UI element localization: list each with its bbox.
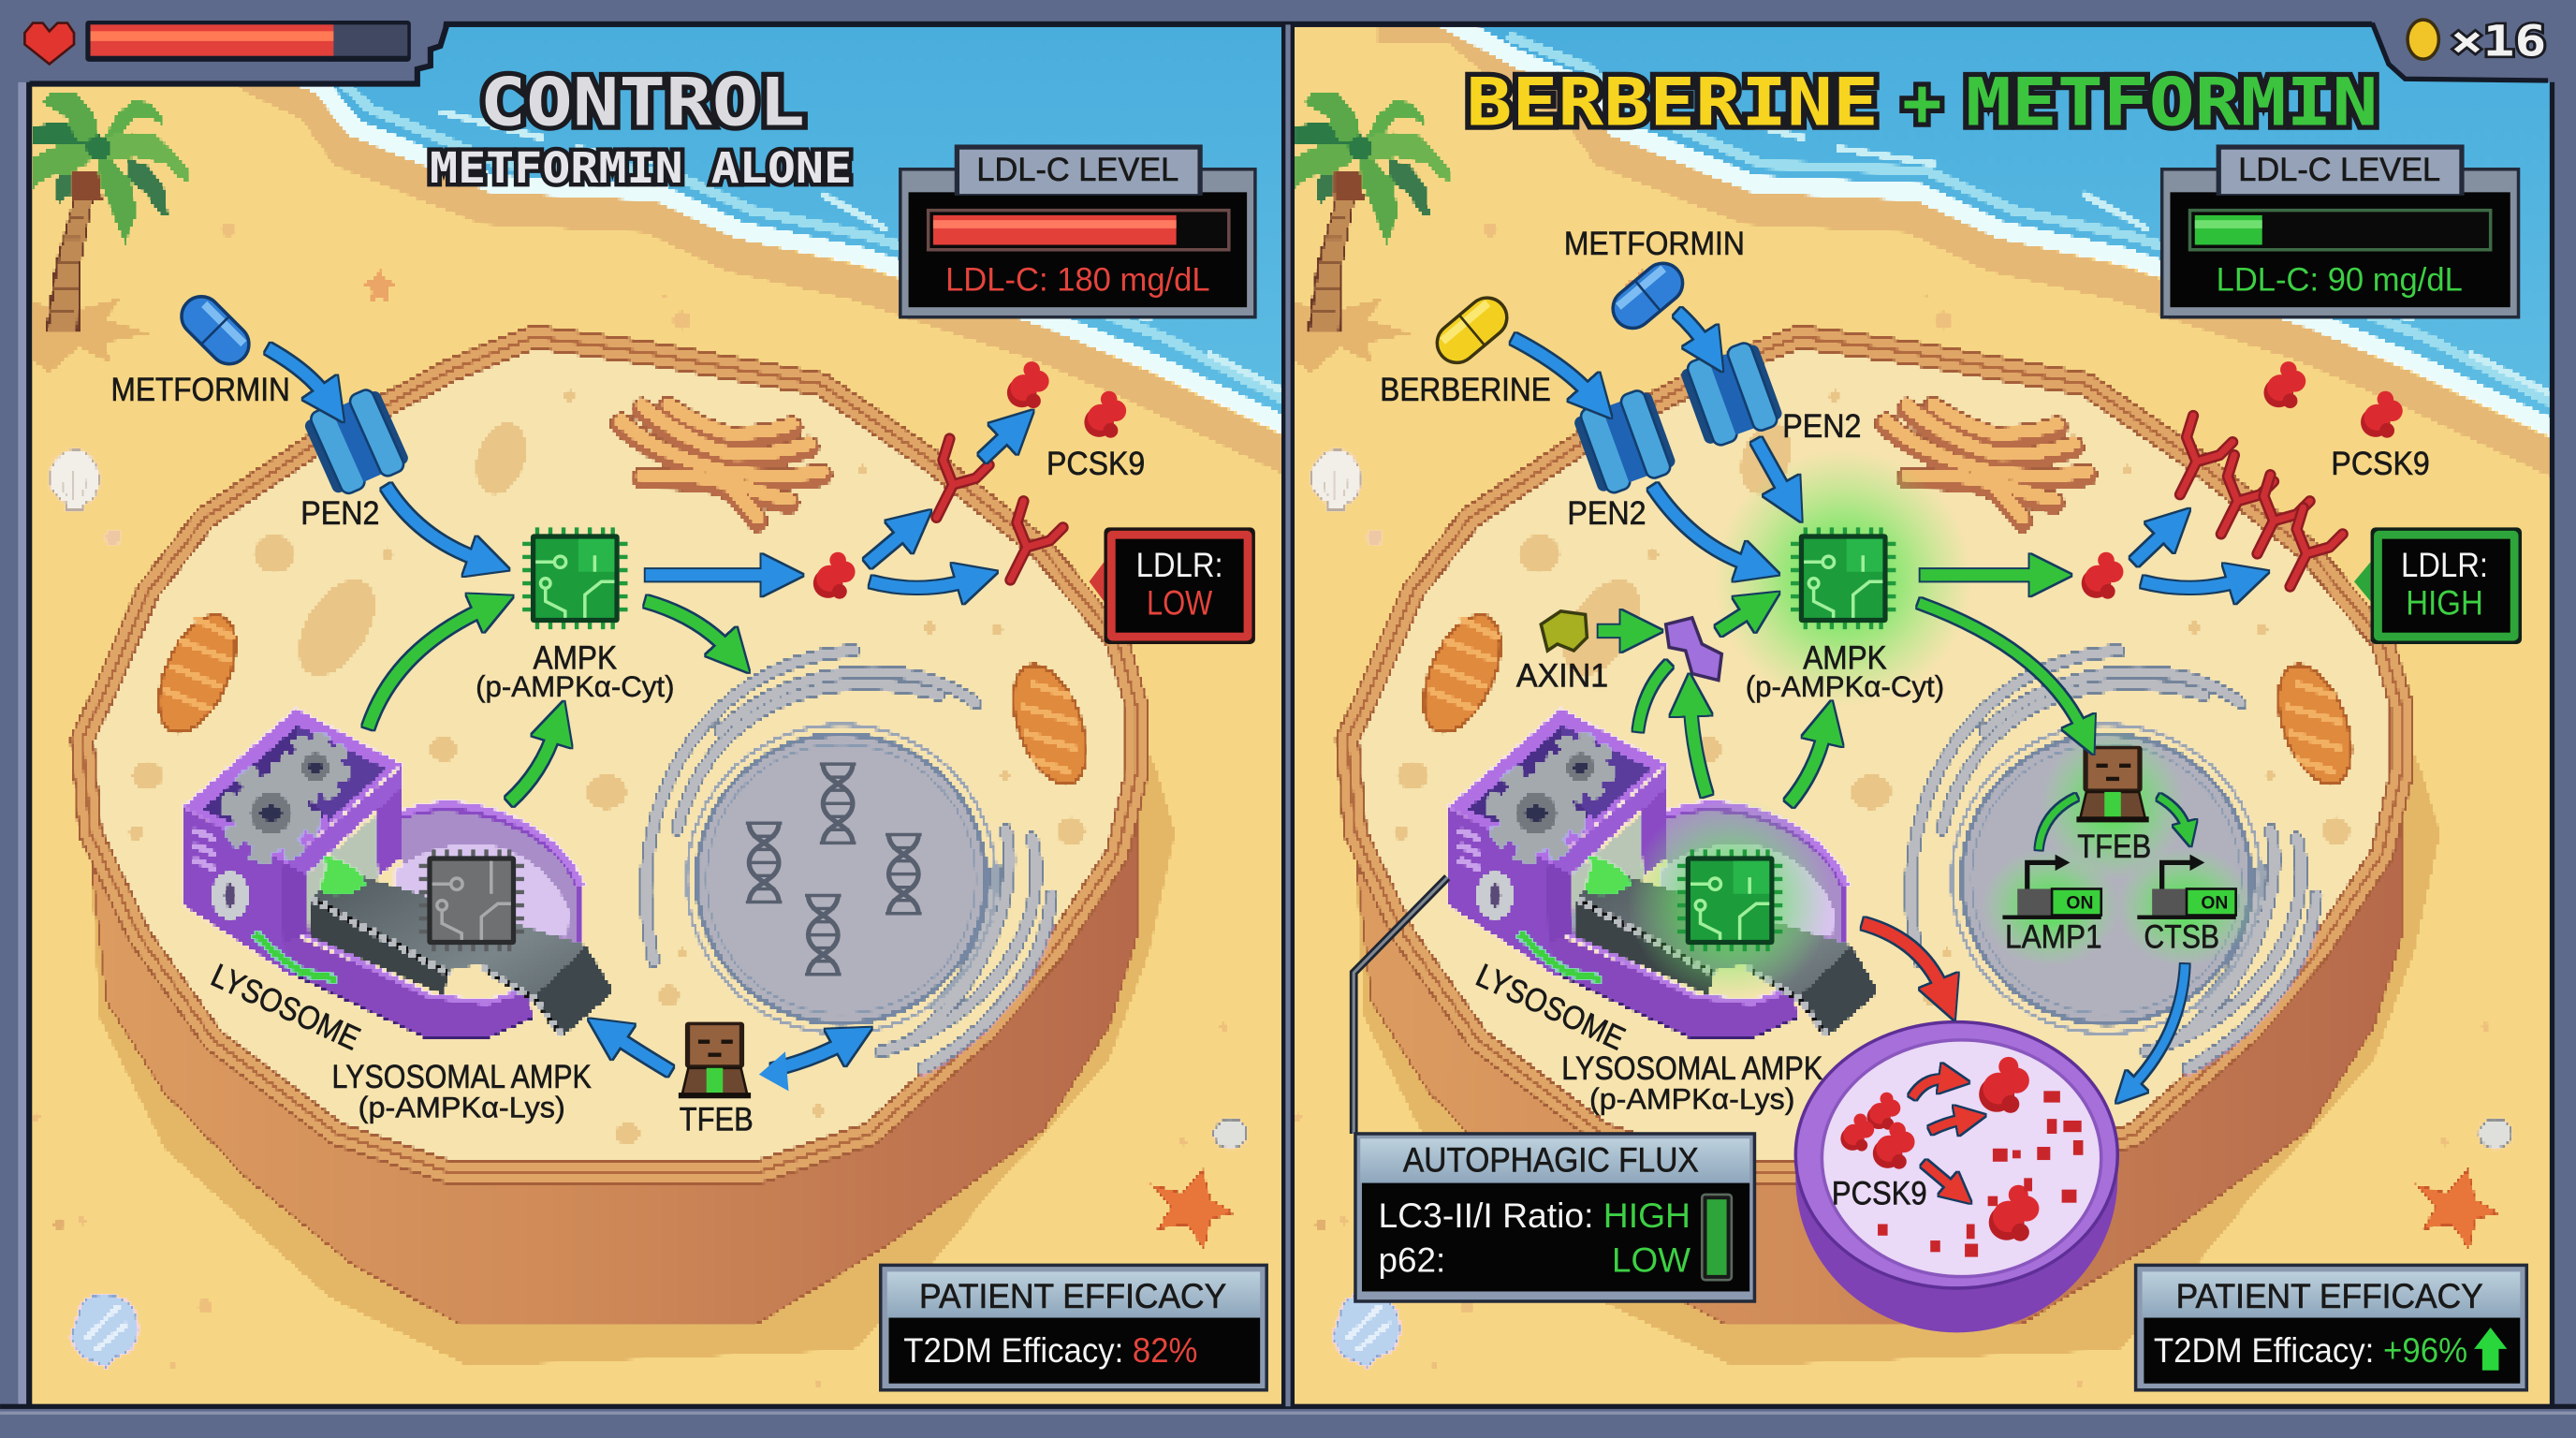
arrow: TFEB to lysosome (613, 1035, 670, 1071)
icon: blue shell (71, 1295, 138, 1367)
arrow: CTSB to lysosome (2130, 964, 2185, 1088)
connector line to autophagic flux panel (1354, 877, 1447, 1134)
health bar (85, 21, 411, 62)
gene switch CTSB (2137, 855, 2236, 919)
pixelated background scene (32, 27, 1281, 1404)
callout: LDLR high (2354, 527, 2522, 644)
title: berberine + metformin: BERBERINE (1466, 64, 1879, 140)
label berberine: BERBERINE (1380, 372, 1551, 408)
icon: up arrow (2474, 1328, 2507, 1371)
arrows (268, 348, 1012, 1071)
p62 value: LOW (1612, 1240, 1690, 1279)
icon: berberine pill (1429, 290, 1515, 371)
title: control: CONTROL (480, 64, 805, 140)
golgi apparatus (621, 404, 822, 522)
panel: patient efficacy control (879, 1264, 1268, 1392)
PCSK9 free (1007, 361, 1126, 438)
gene switch CTSB: ON (2201, 894, 2228, 914)
icon: starfish (2415, 1170, 2498, 1249)
icon: metformin pill (173, 288, 257, 372)
arrow: PEN2 to AMPK lower (1653, 486, 1751, 565)
arrow: lysosome to complex left (1638, 664, 1669, 731)
background: sea and sand (1262, 0, 2576, 1438)
HUD: coin counter (2371, 0, 2576, 82)
panel: berberine + metformin scene (right) (1262, 0, 2576, 1438)
background: sea and sand (32, 27, 1281, 1404)
label AMPK: AMPK (1803, 639, 1887, 676)
arrow: AMPK to nucleus (646, 601, 729, 651)
title: berberine + metformin: METFORMIN (1966, 64, 2378, 140)
arrow: PCSK9 to LDLR (871, 580, 970, 588)
HUD: health bar (0, 0, 446, 84)
label lysosome: LYSOSOME (1471, 957, 1631, 1058)
arrow: AMPK to PCSK9 (1921, 572, 2042, 579)
arrow: AMPK to PCSK9 (646, 572, 774, 579)
beach decorations (1293, 222, 2491, 1388)
label metformin: METFORMIN (1564, 226, 1745, 262)
gene switch LAMP1 (2002, 855, 2101, 919)
panel: LDL-C level combo (2160, 144, 2520, 318)
label CTSB: CTSB (2144, 919, 2219, 956)
value: LDL-C: 180 mg/dL (945, 262, 1210, 299)
mitochondrion right (999, 655, 1101, 794)
arrow: PEN2 to AMPK (386, 486, 481, 560)
label PCSK9: PCSK9 (1046, 446, 1145, 482)
label p-AMPK lys: (p-AMPKα-Lys) (1589, 1082, 1794, 1116)
panel: control scene (left) (32, 27, 1281, 1404)
panel: patient efficacy combo (2134, 1264, 2528, 1392)
panel: LDL-C level control (899, 144, 1257, 318)
arrow: fragment flow 1 (1912, 1079, 1949, 1097)
lysosome machine (1447, 708, 1876, 1038)
label PEN2 upper: PEN2 (1782, 408, 1862, 445)
arrowhead: TFEB exchange back end (759, 1051, 788, 1091)
label AXIN1: AXIN1 (1516, 658, 1608, 695)
callout: LDLR low (1090, 527, 1255, 644)
panel: autophagic flux (1354, 1132, 1756, 1303)
label PCSK9 in lysosome: PCSK9 (1832, 1175, 1927, 1211)
label metformin: METFORMIN (111, 372, 290, 408)
lysosome machine (183, 708, 611, 1038)
arrow: lysosome to AMPK (1789, 729, 1825, 803)
nucleus (1952, 725, 2261, 1034)
nucleus (687, 725, 996, 1034)
PEN2 channel (301, 385, 412, 499)
AMPK chip (522, 527, 627, 629)
golgi apparatus (1886, 404, 2086, 522)
arrow: TFEB to LAMP1 (2039, 797, 2076, 849)
arrow: receptor to free PCSK9 (983, 431, 1012, 459)
icon: palm tree (1295, 94, 1453, 374)
coin count: ×16 (2452, 17, 2546, 66)
label PEN2: PEN2 (300, 495, 379, 532)
icon: AXIN1 (1541, 611, 1587, 651)
arrow: TFEB nucleus exchange (772, 1042, 846, 1070)
AMPK chip (1791, 527, 1895, 629)
icon: pebble (1214, 1119, 1247, 1149)
label p-AMPK cyt: (p-AMPKα-Cyt) (1746, 669, 1944, 703)
glow: lysosomal AMPK (1628, 799, 1832, 1003)
label p-AMPK cyt: (p-AMPKα-Cyt) (476, 669, 674, 703)
heading: LDL-C LEVEL (2238, 152, 2440, 188)
icon: pebble (2479, 1119, 2511, 1149)
PCSK9 free (2263, 361, 2403, 438)
labels: combo scene (1380, 226, 2430, 1211)
TFEB character (2076, 746, 2149, 822)
value: T2DM Efficacy: +96% (2154, 1331, 2467, 1370)
PCSK9 fragments (1840, 1057, 2083, 1257)
icon: purple complex (1666, 618, 1721, 681)
inactive lysosomal AMPK chip (419, 849, 524, 951)
row: p62: p62: (1379, 1240, 1445, 1279)
arrow: AMPK to TFEB (1919, 603, 2083, 731)
pixelated background scene (1262, 0, 2576, 1438)
PEN2 channel upper (1677, 339, 1785, 450)
endoplasmic reticulum (646, 651, 1051, 1068)
arrow: complex to AMPK (1719, 608, 1754, 631)
heading: AUTOPHAGIC FLUX (1403, 1140, 1699, 1179)
callout: LDLR high: LDLR: (2401, 546, 2488, 584)
arrow: PEN2 to AMPK upper (1756, 440, 1788, 496)
cell body and membrane (1347, 337, 2441, 1367)
DNA helices (746, 764, 922, 975)
arrow: metformin to PEN2 (268, 348, 327, 398)
row: LC3 ratio: LC3-II/I Ratio: HIGH (1379, 1196, 1690, 1235)
level bar (2190, 211, 2491, 250)
callout: LDLR low: LOW (1147, 583, 1212, 622)
label AMPK: AMPK (534, 639, 618, 676)
gene switch LAMP1: ON (2066, 894, 2093, 914)
LDL receptors (936, 439, 1063, 580)
label lysosome: LYSOSOME (206, 957, 365, 1058)
arrow: lysosome to complex right (1690, 703, 1707, 795)
arrow: PCSK9 to LDLR (2143, 580, 2241, 588)
mitochondrion left (143, 604, 251, 743)
icon: blue shell (1332, 1295, 1399, 1367)
PCSK9 intracellular (2082, 552, 2123, 599)
mitochondrion right (2264, 655, 2365, 794)
arrow: PCSK9 to receptor (868, 529, 909, 564)
arrow: metformin to PEN2 (1677, 312, 1707, 346)
arrow: PCSK9 to receptor (2134, 529, 2169, 562)
label LAMP1: LAMP1 (2005, 919, 2102, 956)
heading: LDL-C LEVEL (976, 152, 1178, 188)
arrows (1513, 312, 2241, 1190)
arrow: lysosome to AMPK long (368, 608, 487, 727)
label PEN2 lower: PEN2 (1567, 495, 1647, 532)
label p-AMPK lys: (p-AMPKα-Lys) (359, 1090, 565, 1123)
label PCSK9: PCSK9 (2331, 446, 2430, 482)
arrow: fragment flow 2 (1930, 1119, 1965, 1130)
icon: coin (2408, 20, 2438, 59)
icon: metformin pill (1605, 256, 1690, 336)
autolysosome dish (1795, 1022, 2117, 1332)
label TFEB: TFEB (680, 1101, 754, 1137)
arrow: lysosomal AMPK to autolysosome (1863, 923, 1943, 992)
arrow: berberine to PEN2 (1513, 339, 1592, 396)
PEN2 channel lower (1571, 387, 1678, 498)
labels: control scene (111, 372, 1145, 1137)
arrow: fragment flow 3 (1924, 1164, 1955, 1190)
TFEB character (679, 1022, 751, 1098)
LDL receptors (2180, 416, 2343, 587)
arrow: AXIN1 to complex (1599, 627, 1633, 634)
arrow: TFEB to CTSB (2159, 797, 2187, 829)
label lysosomal AMPK: LYSOSOMAL AMPK (332, 1059, 592, 1095)
label lysosomal AMPK: LYSOSOMAL AMPK (1561, 1050, 1823, 1087)
PCSK9 intracellular (813, 552, 856, 599)
active lysosomal AMPK chip (1677, 849, 1782, 951)
value: LDL-C: 90 mg/dL (2217, 262, 2463, 299)
glow: cytosolic AMPK (1715, 450, 1971, 707)
beach decorations (31, 222, 1229, 1388)
gauge (1702, 1195, 1732, 1280)
callout: LDLR low: LDLR: (1136, 546, 1223, 584)
arrow: lysosome to AMPK short (509, 729, 555, 801)
icon: palm tree (33, 94, 191, 374)
icon: heart (24, 23, 74, 64)
heading: PATIENT EFFICACY (2176, 1277, 2483, 1315)
TFEB glow in nucleus (1982, 729, 2254, 966)
title: berberine + metformin: + (1902, 64, 1942, 140)
level bar (929, 211, 1229, 250)
mitochondrion left (1408, 604, 1516, 743)
label TFEB: TFEB (2077, 829, 2151, 865)
value: T2DM Efficacy: 82% (903, 1331, 1197, 1370)
subtitle: metformin alone: METFORMIN ALONE (430, 143, 852, 193)
callout: LDLR high: HIGH (2406, 583, 2483, 622)
cell body and membrane (82, 337, 1177, 1367)
title: berberine + metformin (1466, 64, 2378, 140)
endoplasmic reticulum (1910, 651, 2317, 1068)
heading: PATIENT EFFICACY (919, 1277, 1226, 1315)
icon: starfish (1150, 1170, 1234, 1249)
